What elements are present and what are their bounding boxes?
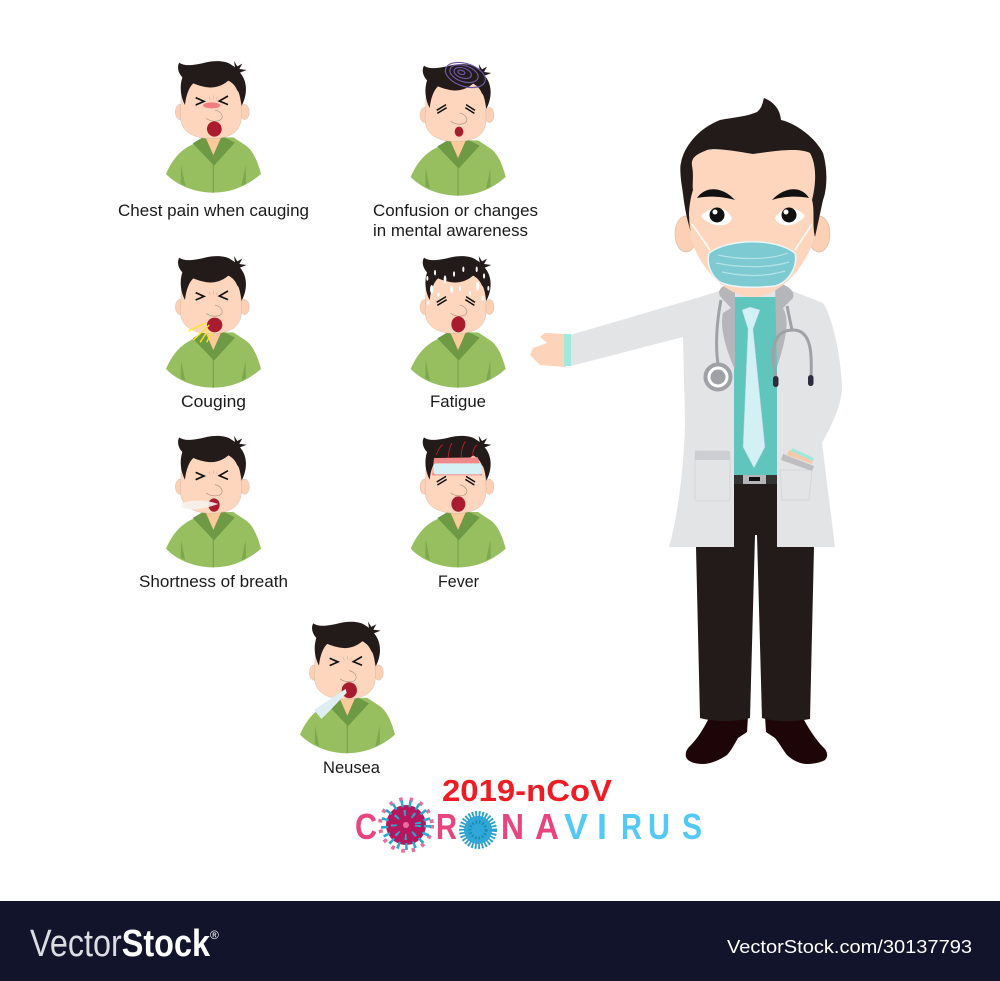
label: couging: Couging [181, 392, 246, 411]
registered mark: ® [210, 928, 219, 942]
eyes [701, 208, 805, 225]
symptom: couging [166, 256, 261, 411]
avatar: fever with cold pack [411, 436, 506, 567]
label: shortness of breath: Shortness of breath [139, 572, 288, 591]
trousers [696, 478, 814, 721]
word: coronavirus: R [621, 806, 642, 847]
label: chest pain: Chest pain when cauging [118, 201, 309, 220]
cuff [564, 334, 571, 366]
word: coronavirus: N [501, 806, 524, 847]
label: confusion: in mental awareness [373, 221, 528, 240]
word: coronavirus: C [355, 806, 377, 847]
shirt [734, 297, 777, 476]
face [690, 150, 815, 297]
image id: VectorStock.com/30137793 [727, 937, 972, 957]
doctor illustration [530, 98, 842, 764]
symptom: fever [411, 436, 506, 591]
eyebrows [697, 189, 809, 200]
avatar: fatigue with sweat [411, 256, 506, 388]
face mask [692, 224, 812, 287]
avatar: neusea with tissue [300, 622, 395, 753]
avatar: confusion with spiral [411, 58, 506, 196]
stethoscope [706, 300, 814, 390]
avatar: chest pain [166, 61, 261, 193]
hand [530, 333, 566, 367]
symptom: confusion [373, 58, 538, 240]
symptom: neusea [300, 622, 395, 777]
tie [742, 307, 765, 468]
lapels and hood [719, 282, 794, 370]
footer bar [0, 901, 1000, 981]
logo heading: 2019-nCoV [442, 773, 612, 808]
ears [675, 216, 830, 252]
icon: blue virus [462, 814, 494, 846]
label: fever: Fever [438, 572, 479, 591]
word: coronavirus: V [564, 806, 588, 847]
pockets [695, 448, 814, 501]
word: coronavirus: U [648, 806, 670, 847]
hair [680, 98, 826, 237]
icon: pink virus [380, 799, 432, 851]
label: fatigue: Fatigue [430, 392, 486, 411]
label: neusea: Neusea [323, 758, 381, 777]
word: coronavirus: I [597, 806, 607, 847]
logo: 2019-nCoV coronavirus [355, 773, 702, 851]
coat and sleeve [570, 290, 842, 547]
avatar: couging [166, 256, 261, 388]
word: coronavirus: R [436, 806, 457, 847]
shoes [686, 716, 827, 764]
belt [734, 475, 777, 484]
avatar: shortness of breath [166, 436, 261, 567]
symptom: fatigue [411, 256, 506, 411]
word: coronavirus: S [682, 806, 702, 847]
word: coronavirus: A [535, 806, 559, 847]
label: confusion: Confusion or changes [373, 201, 538, 220]
symptom: shortness of breath [139, 436, 288, 591]
symptom: chest pain when cauging [118, 61, 309, 220]
word: coronavirus [355, 806, 702, 847]
brand wordmark: VectorStock [30, 923, 211, 965]
